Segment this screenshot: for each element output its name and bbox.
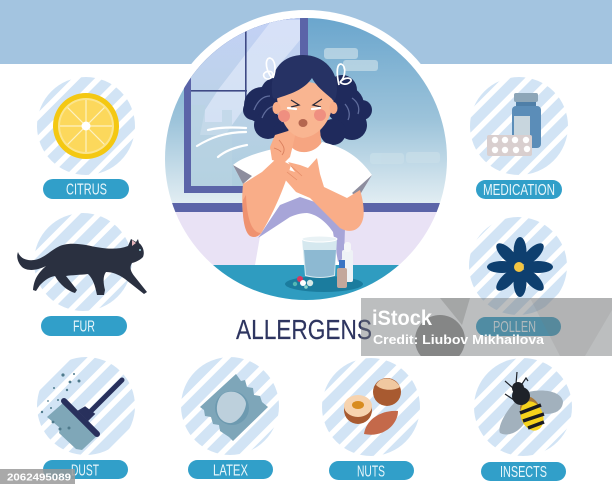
watermark credit: Credit: Liubov Mikhailova xyxy=(373,333,545,347)
icon: nuts xyxy=(344,378,401,435)
icon: bee xyxy=(499,372,563,434)
icon: broom and dust xyxy=(41,373,122,450)
watermark banner xyxy=(361,298,612,356)
white ring xyxy=(157,10,455,308)
label pill: MEDICATION xyxy=(483,182,555,199)
spray bottle xyxy=(342,242,353,282)
face xyxy=(276,81,334,138)
stripe disc xyxy=(181,357,279,455)
label pill: FUR xyxy=(73,318,95,336)
image id tag xyxy=(0,469,75,484)
shirt shading xyxy=(258,197,345,262)
table shadow xyxy=(285,276,363,292)
lower wall xyxy=(176,212,436,265)
label pill: POLLEN xyxy=(493,319,536,336)
pills xyxy=(293,276,313,289)
stripe disc xyxy=(474,358,572,456)
wall band xyxy=(165,203,450,212)
allergen: pollen xyxy=(469,217,567,336)
stripe disc xyxy=(470,77,568,175)
allergen: dust xyxy=(37,357,135,480)
allergen: insects xyxy=(474,358,572,481)
stripe disc xyxy=(322,358,420,456)
shirt xyxy=(233,142,372,265)
label pill: INSECTS xyxy=(500,464,547,481)
window xyxy=(184,15,308,193)
label pill: CITRUS xyxy=(66,182,107,198)
cheeks xyxy=(278,110,290,122)
girl xyxy=(233,55,372,265)
icon: latex packet xyxy=(200,374,268,441)
clouds on wall xyxy=(324,48,440,164)
allergen: fur xyxy=(17,213,147,336)
hair back xyxy=(243,75,372,145)
label pill: LATEX xyxy=(213,462,248,480)
neck xyxy=(292,130,322,152)
label pill: NUTS xyxy=(357,464,385,480)
icon: black cat xyxy=(17,239,147,295)
near arm xyxy=(242,158,291,237)
allergen: nuts xyxy=(322,358,420,480)
header band xyxy=(0,0,612,64)
stripe disc xyxy=(469,217,567,315)
panel: central scene xyxy=(165,15,450,305)
allergen: citrus xyxy=(37,77,135,199)
icon: flower xyxy=(487,237,553,297)
image id tag: 2062495089 xyxy=(7,472,71,484)
icon: lemon slice xyxy=(53,93,119,159)
small bottle xyxy=(337,260,347,288)
hair top xyxy=(272,55,337,101)
allergen: latex xyxy=(181,357,279,480)
stripe disc xyxy=(37,357,135,455)
label pill: DUST xyxy=(71,462,99,480)
mouth xyxy=(298,119,308,127)
allergen: medication xyxy=(470,77,568,199)
watermark brand: iStock xyxy=(372,307,432,330)
table xyxy=(213,265,399,300)
far arm and hand on chest xyxy=(282,158,364,231)
hair bows xyxy=(264,58,351,85)
water glass xyxy=(302,236,337,278)
eyes xyxy=(291,99,322,107)
wall xyxy=(165,15,450,205)
title: ALLERGENS xyxy=(236,314,372,345)
stripe disc xyxy=(34,213,132,311)
fist xyxy=(270,130,292,162)
stripe disc xyxy=(37,77,135,175)
icon: pill bottle and blister xyxy=(487,93,541,156)
